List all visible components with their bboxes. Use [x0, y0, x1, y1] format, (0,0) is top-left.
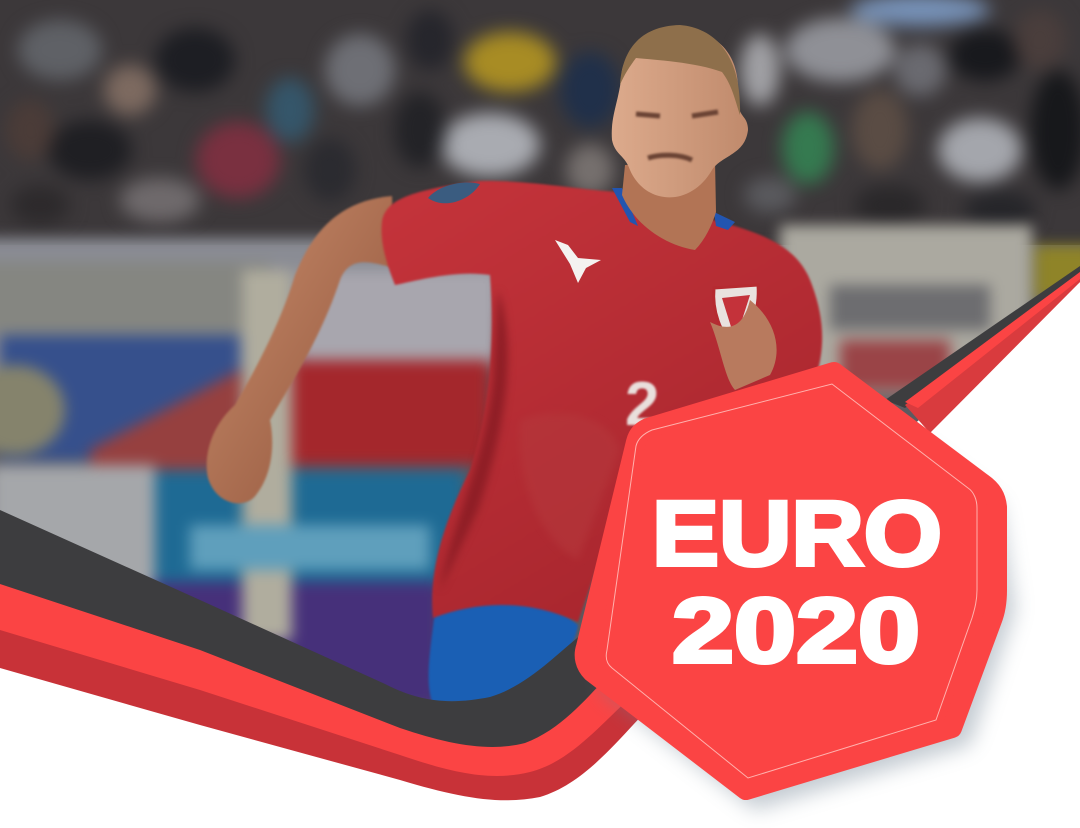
title: EURO 2020: EURO — [652, 483, 942, 585]
white corner: lower right — [560, 282, 1080, 828]
neck — [622, 160, 716, 250]
player photo — [207, 25, 822, 702]
badge: red hexagon — [585, 372, 997, 790]
puma logo — [555, 240, 601, 283]
player shorts — [429, 599, 578, 702]
player arm — [207, 196, 395, 503]
shirt collar — [612, 188, 735, 230]
head — [612, 27, 748, 197]
shirt number: 2 — [625, 370, 659, 439]
title: EURO 2020 — [652, 483, 942, 682]
crest — [714, 285, 758, 345]
ribbon: dark red base — [0, 600, 645, 800]
player shirt — [382, 181, 822, 622]
white band: lower left — [0, 660, 560, 828]
ribbon: bright red — [0, 570, 628, 776]
badge inner outline — [606, 384, 977, 778]
hair — [620, 25, 740, 115]
ribbon: dark grey — [0, 510, 606, 747]
eyes and mouth — [636, 112, 718, 160]
title: EURO 2020: 2020 — [672, 580, 920, 682]
badge on sleeve — [428, 183, 480, 203]
ribbon: top right — [885, 266, 1080, 433]
badge shadow — [600, 388, 1015, 810]
hand — [710, 300, 777, 390]
